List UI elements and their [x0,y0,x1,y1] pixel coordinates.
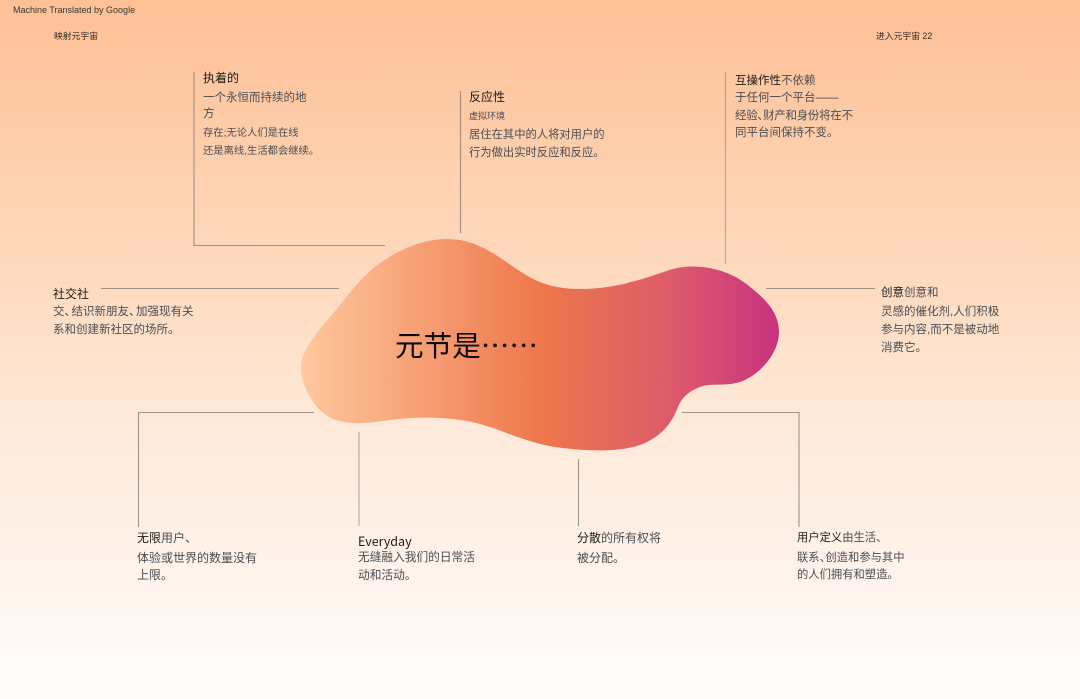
text: interoperable: 经验、财产和身份将在不 [735,110,853,122]
connector lines [101,72,875,527]
header right: 进入元宇宙 22 [876,31,932,41]
text: unlimited [137,531,257,582]
text: everyday: 动和活动。 [358,569,416,582]
text: creative: 灵感的催化剂,人们积极 [881,306,999,318]
text: social [53,287,194,336]
blob shape [301,239,779,450]
text: persistent: 一个永恒而持续的地 [203,92,306,104]
text: user defined: 的人们拥有和塑造。 [797,569,899,581]
text: persistent: 还是离线,生活都会继续。 [203,146,319,157]
text: user defined: 用户定义由生活、 [797,532,887,544]
machine translation note: Machine Translated by Google [13,5,135,15]
text: persistent [203,71,319,157]
text: social: 社交社 [53,287,89,301]
text: everyday: Everyday [358,531,412,550]
text: creative: 参与内容,而不是被动地 [881,324,999,336]
text: persistent: 存在;无论人们是在线 [203,128,299,139]
text: interoperable: 互操作性不依赖 [735,75,816,87]
text: creative: 创意创意和 [881,287,938,299]
text: interoperable: 于任何一个平台—— [735,92,838,104]
text: social: 系和创建新社区的场所。 [53,324,180,336]
text: unlimited: 无限用户、 [137,531,197,545]
text: decentralized [577,531,661,565]
text: unlimited: 上限。 [137,568,173,582]
text: user defined [797,531,905,581]
text: user defined: 联系、创造和参与其中 [797,552,905,564]
title: 元节是…… [395,324,538,365]
text: decentralized: 被分配。 [577,551,625,565]
text: reactive [469,90,605,159]
header left: 映射元宇宙 [54,31,98,41]
text: unlimited: 体验或世界的数量没有 [137,551,257,565]
text: reactive: 反应性 [469,90,505,104]
text: everyday: 无缝融入我们的日常活 [358,551,475,564]
text: interoperable: 同平台间保持不变。 [735,127,838,139]
text: decentralized: 分散的所有权将 [577,531,661,545]
text: persistent: 执着的 [203,71,239,85]
text: everyday [358,531,475,582]
text: reactive: 虚拟环境 [469,111,505,121]
text: interoperable [735,74,853,139]
text: persistent: 方 [203,108,214,120]
text: reactive: 行为做出实时反应和反应。 [469,147,605,159]
text: social: 交、结识新朋友、加强现有关 [53,306,194,318]
text: reactive: 居住在其中的人将对用户的 [469,129,605,141]
text: creative [881,286,999,354]
text: creative: 消费它。 [881,342,927,354]
